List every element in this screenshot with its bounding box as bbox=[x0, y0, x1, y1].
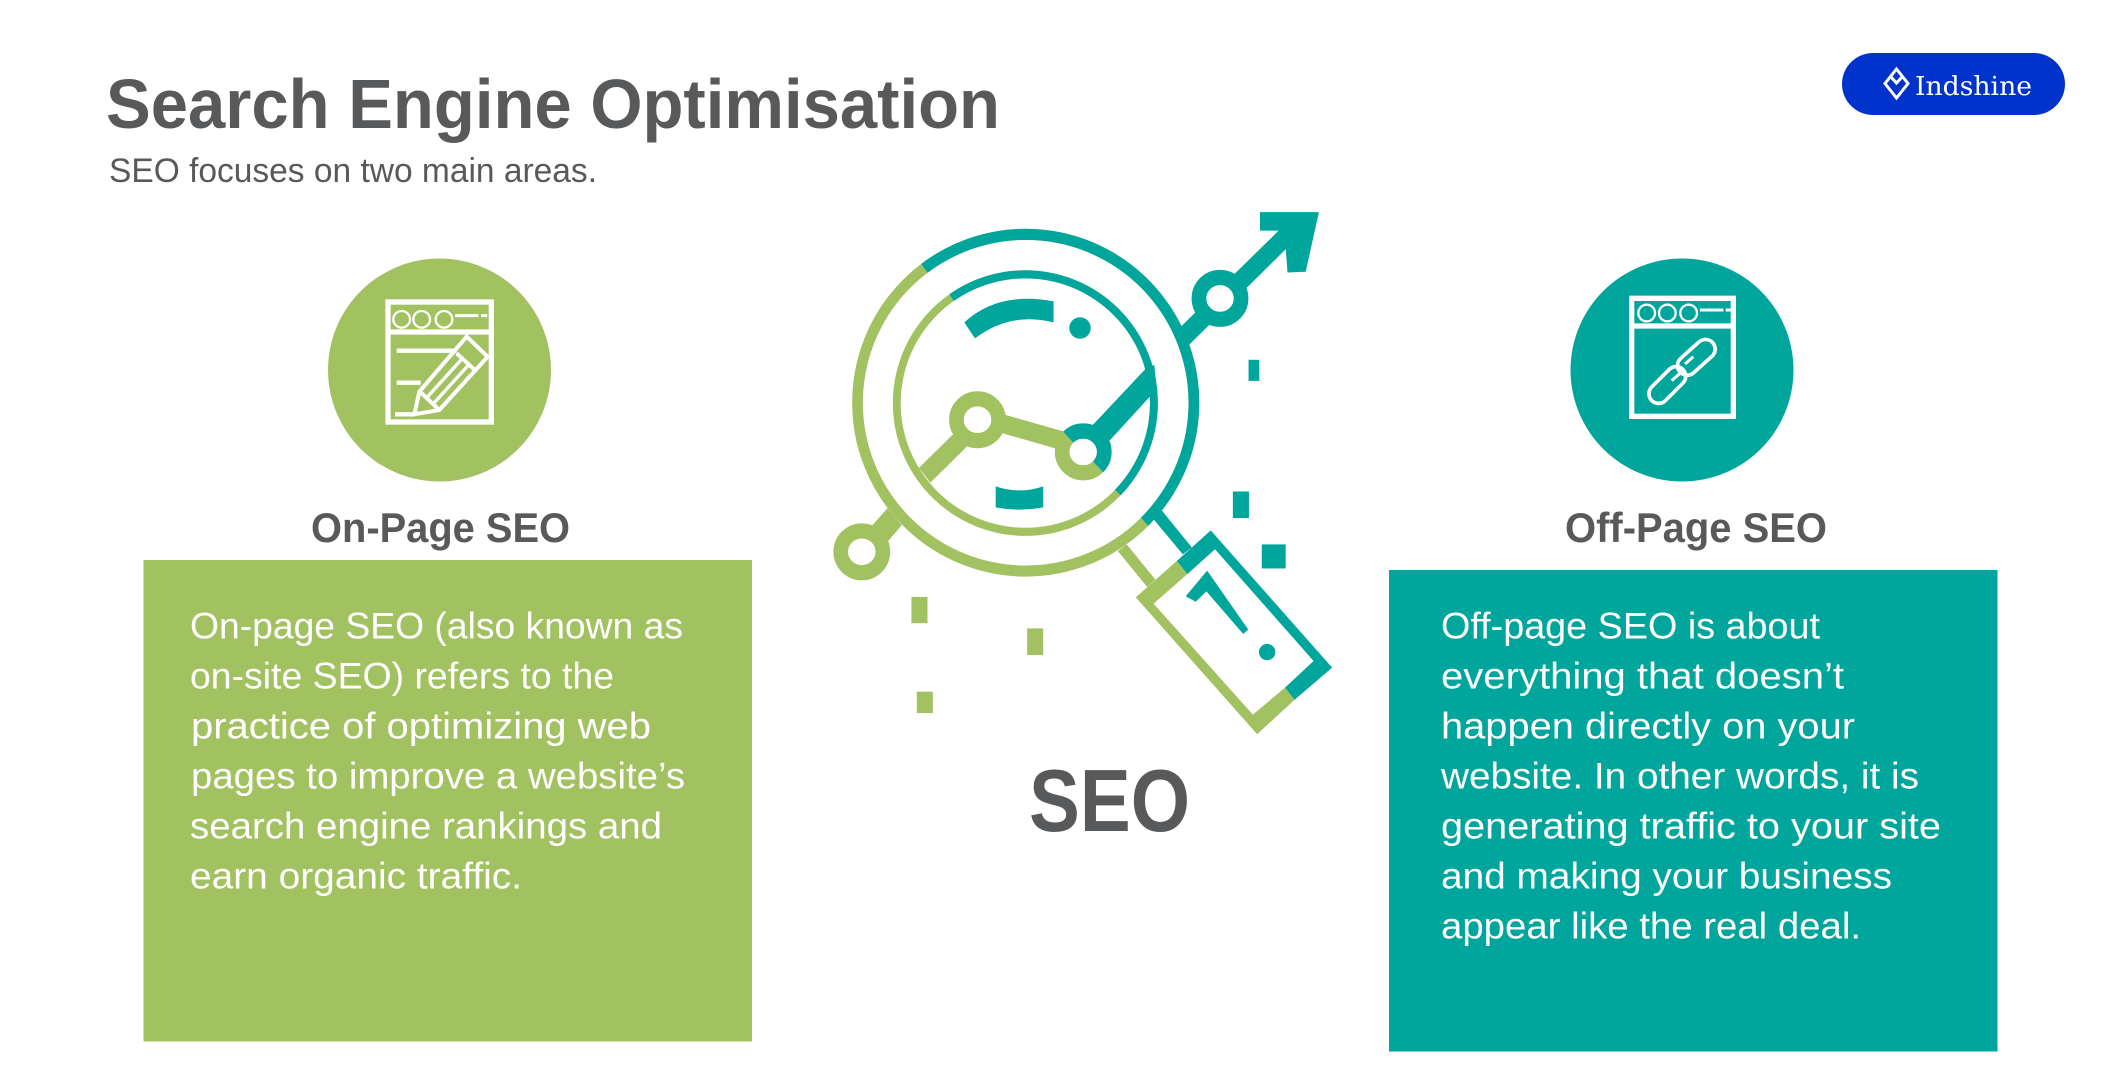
logo wordmark: Indshine bbox=[1915, 72, 2032, 102]
green floating squares bbox=[911, 597, 1043, 713]
off-page description: Off-page SEO is about bbox=[1441, 606, 1821, 646]
icon: web page with chain link bbox=[1570, 258, 1794, 482]
off-page description: website. In other words, it is bbox=[1440, 756, 1919, 796]
chart line inside lens bbox=[919, 365, 1157, 483]
panel: off-page SEO bbox=[1389, 258, 1998, 1052]
green text box bbox=[144, 560, 752, 1042]
outer lens ring bbox=[857, 234, 1194, 571]
off-page description: generating traffic to your site bbox=[1441, 806, 1941, 846]
on-page description: On-page SEO (also known as bbox=[190, 606, 683, 646]
off-page description: and making your business bbox=[1441, 856, 1892, 896]
on-page description: pages to improve a website’s bbox=[191, 756, 685, 796]
left chart stub bbox=[872, 508, 902, 542]
lens glare marks bbox=[964, 299, 1091, 510]
teal text box bbox=[1389, 570, 1998, 1052]
off-page description: appear like the real deal. bbox=[1441, 906, 1861, 946]
icon: web page with pencil bbox=[328, 258, 551, 482]
icon: magnifying glass with rising chart bbox=[841, 212, 1332, 734]
center label: SEO: SEO bbox=[1029, 751, 1190, 850]
off-page description: happen directly on your bbox=[1441, 706, 1855, 746]
off-page description: everything that doesn’t bbox=[1441, 656, 1845, 696]
icon: logo diamond bbox=[1885, 69, 1908, 98]
on-page description: search engine rankings and bbox=[190, 806, 662, 846]
on-page description: practice of optimizing web bbox=[191, 706, 651, 746]
subtitle: SEO focuses on two main areas. bbox=[109, 152, 597, 190]
heading: On-Page SEO: On-Page SEO bbox=[311, 504, 570, 551]
arrow: rising chart arrow bbox=[1181, 212, 1319, 345]
logo badge: Indshine bbox=[1842, 53, 2065, 115]
off-page description bbox=[1440, 606, 1941, 946]
heading: Off-Page SEO: Off-Page SEO bbox=[1565, 504, 1827, 551]
on-page description: earn organic traffic. bbox=[190, 856, 522, 896]
teal floating squares bbox=[1233, 360, 1286, 568]
on-page description: on-site SEO) refers to the bbox=[190, 656, 614, 696]
panel: on-page SEO bbox=[144, 258, 752, 1042]
inner lens ring bbox=[897, 274, 1154, 532]
magnifier handle bbox=[1118, 510, 1332, 734]
on-page description bbox=[190, 606, 685, 896]
chart nodes bbox=[841, 277, 1241, 573]
title: Search Engine Optimisation bbox=[106, 65, 1000, 143]
